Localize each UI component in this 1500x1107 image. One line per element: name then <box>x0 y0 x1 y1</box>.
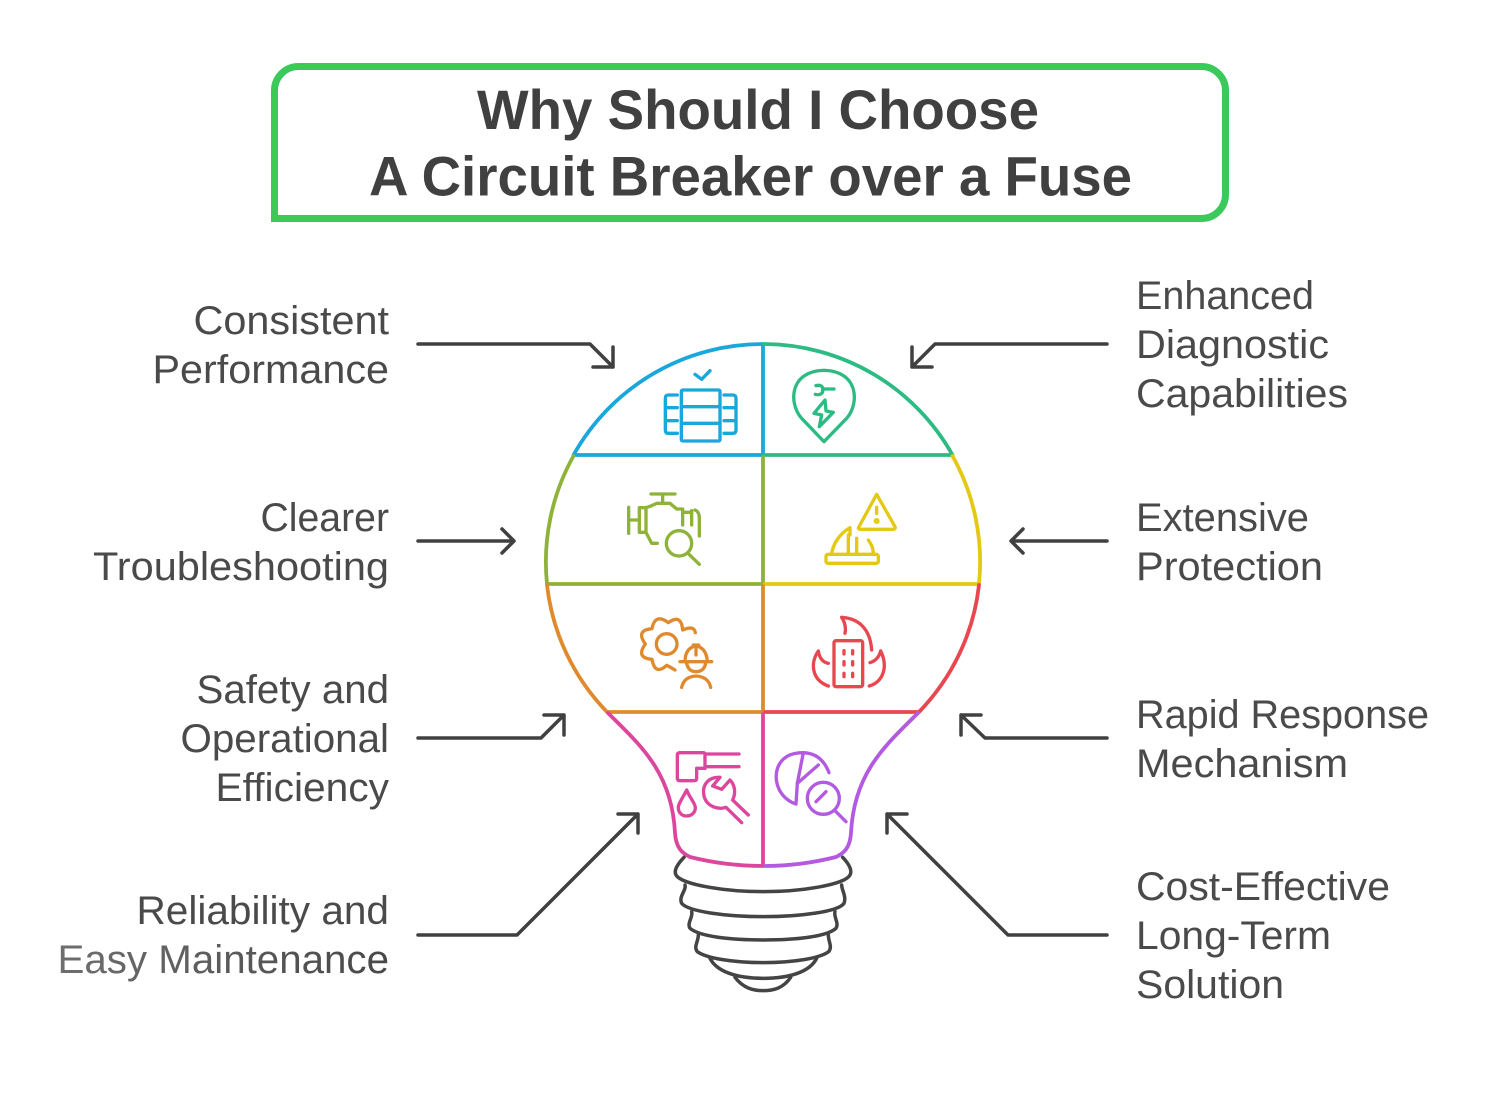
arrow: Enhanced Diagnostic Capabilities <box>912 344 1107 367</box>
label: Rapid Response Mechanism <box>1136 693 1429 786</box>
label: Reliability and Easy Maintenance <box>58 889 389 982</box>
arrow: Extensive Protection <box>1011 529 1107 553</box>
bulb segment: olive <box>546 456 763 584</box>
label: Consistent Performance: Consistent <box>194 299 389 343</box>
label: Enhanced Diagnostic Capabilities: Enhanced <box>1136 274 1314 318</box>
title text: A Circuit Breaker over a Fuse <box>369 144 1132 208</box>
label: Consistent Performance <box>152 299 389 392</box>
label: Rapid Response Mechanism: Rapid Response <box>1136 693 1429 737</box>
label: Enhanced Diagnostic Capabilities: Diagnostic <box>1136 323 1329 367</box>
arrow: Clearer Troubleshooting <box>418 529 514 553</box>
label: Cost-Effective Long-Term Solution: Cost-Effective <box>1136 865 1390 909</box>
arrow: Reliability and Easy Maintenance <box>418 814 638 935</box>
label: Safety and Operational Efficiency: Operational <box>180 717 389 761</box>
icon: hard hat with warning triangle <box>826 494 895 563</box>
arrow: Consistent Performance <box>418 344 613 367</box>
icon: faucet, drop and wrench <box>677 753 748 823</box>
bulb segment: orange <box>547 585 763 712</box>
bulb segment: green <box>764 344 952 455</box>
bulb segment: purple <box>765 713 918 866</box>
label: Rapid Response Mechanism: Mechanism <box>1136 742 1348 786</box>
icon: location pin with wrench and bolt <box>794 370 854 442</box>
label: Extensive Protection: Protection <box>1136 545 1323 589</box>
light bulb <box>546 344 980 991</box>
label: Extensive Protection <box>1136 496 1323 589</box>
label: Reliability and Easy Maintenance: Easy Maintenance <box>58 938 389 982</box>
bulb segment: yellow <box>765 456 980 584</box>
icon: engine with magnifier <box>629 494 699 564</box>
label: Consistent Performance: Performance <box>152 348 389 392</box>
icon: server with check <box>665 371 736 441</box>
label: Clearer Troubleshooting <box>93 496 389 589</box>
arrow: Cost-Effective Long-Term Solution <box>887 814 1107 935</box>
label: Enhanced Diagnostic Capabilities: Capabilities <box>1136 372 1348 416</box>
bulb segment: blue <box>574 344 763 455</box>
label: Safety and Operational Efficiency: Efficiency <box>216 766 389 810</box>
bulb screw base <box>675 857 851 991</box>
icon: burning building <box>813 617 884 687</box>
label: Cost-Effective Long-Term Solution: Long-Term <box>1136 914 1331 958</box>
title text <box>369 78 1132 208</box>
arrow: Rapid Response Mechanism <box>961 715 1107 738</box>
bulb segment: pink <box>608 713 763 866</box>
arrow: Safety and Operational Efficiency <box>418 715 564 738</box>
label: Safety and Operational Efficiency <box>180 668 389 810</box>
label: Safety and Operational Efficiency: Safety and <box>196 668 389 712</box>
bulb segment: red <box>765 585 979 712</box>
icon: pie chart with magnifier <box>776 753 846 822</box>
label: Cost-Effective Long-Term Solution <box>1136 865 1390 1007</box>
title box <box>274 66 1226 218</box>
label: Cost-Effective Long-Term Solution: Solution <box>1136 963 1284 1007</box>
title text: Why Should I Choose <box>477 78 1039 141</box>
label: Enhanced Diagnostic Capabilities <box>1136 274 1348 416</box>
label: Extensive Protection: Extensive <box>1136 496 1309 540</box>
label: Reliability and Easy Maintenance: Reliability and <box>136 889 389 933</box>
label: Clearer Troubleshooting: Clearer <box>260 496 389 540</box>
label: Clearer Troubleshooting: Troubleshooting <box>93 545 389 589</box>
icon: gear with engineer <box>642 619 712 687</box>
